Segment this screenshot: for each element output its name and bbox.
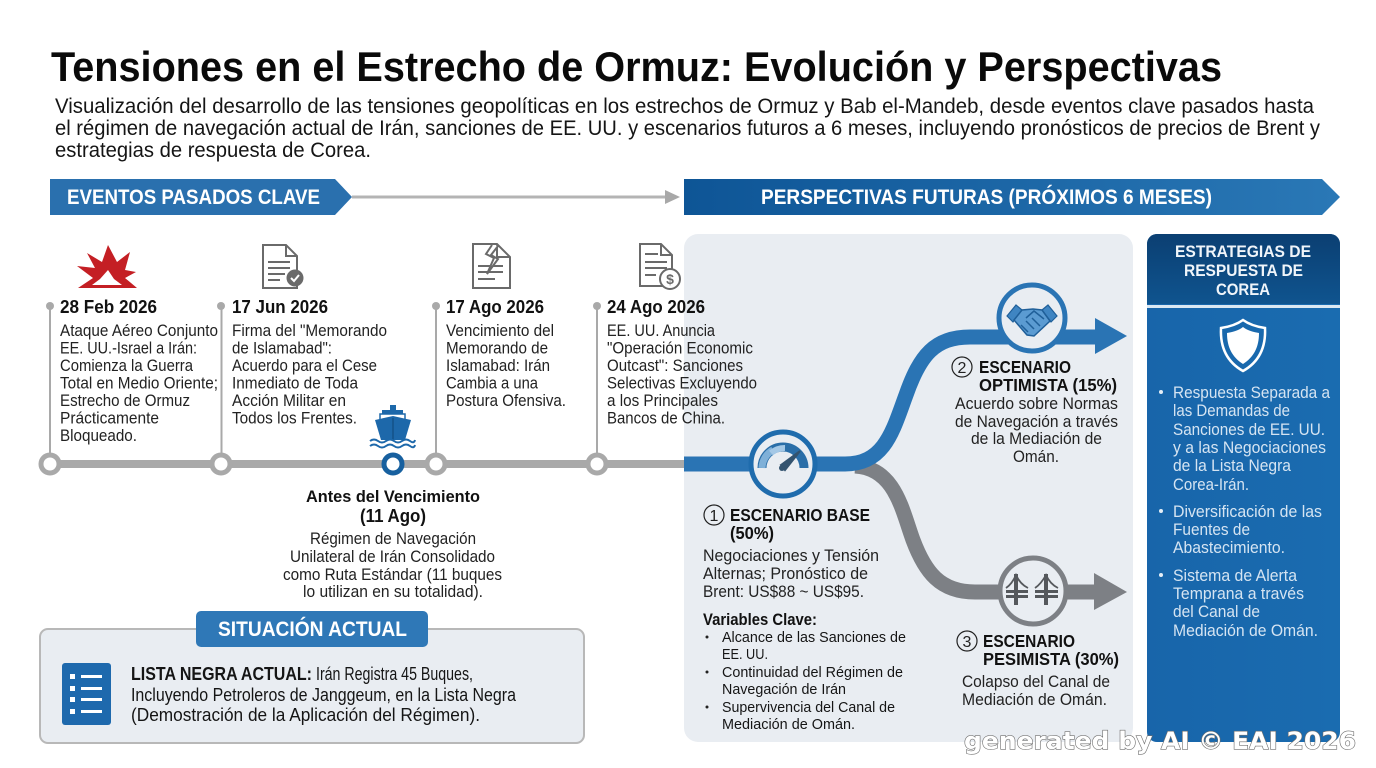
event: 28 Feb 2026: Prácticamente	[60, 408, 159, 428]
scenario: base: 1	[710, 508, 719, 525]
text: strategy list: del Canal de	[1173, 602, 1260, 621]
subtitle text block: Visualización del desarrollo de las tensiones geopolíticas en los estrechos de Ormuz y Bab el-Mandeb, desde eventos clave pasados hasta	[55, 94, 1314, 118]
icon: sanction document: $	[666, 271, 674, 287]
scenario: pesimista: Colapso del Canal de	[962, 672, 1110, 691]
text: lista negra: LISTA NEGRA ACTUAL:	[131, 664, 312, 684]
banner: eventos pasados clave: EVENTOS PASADOS CLAVE	[67, 186, 320, 209]
icon: explosion	[77, 245, 137, 288]
event: 17 Ago 2026: Vencimiento del	[446, 321, 554, 340]
event: 24 Ago 2026: Selectivas Excluyendo	[607, 374, 757, 392]
icon: sanction document	[640, 244, 680, 289]
text: strategy list: Corea-Irán.	[1173, 475, 1249, 494]
text: strategy list: Temprana a través	[1173, 584, 1304, 603]
event: 28 Feb 2026	[60, 297, 218, 445]
panel header: RESPUESTA DE	[1184, 261, 1303, 280]
arrow: optimistic path	[684, 318, 1127, 464]
panel header: ESTRATEGIAS DE	[1175, 242, 1311, 261]
event: antes del vencimiento: Antes del Vencimiento	[306, 487, 480, 506]
panel: situación actual	[40, 611, 584, 743]
event: 17 Ago 2026: Cambia a una	[446, 374, 538, 392]
event: antes del vencimiento: Unilateral de Irán Consolidado	[290, 547, 495, 566]
scenario: pesimista: ESCENARIO	[983, 631, 1075, 651]
scenario: optimista	[952, 357, 1118, 466]
text: variables clave: Mediación de Omán.	[722, 716, 855, 733]
event: 17 Jun 2026	[232, 297, 387, 428]
scenario: pesimista: PESIMISTA (30%)	[983, 649, 1119, 669]
event: 24 Ago 2026: 24 Ago 2026	[607, 297, 705, 317]
event: 28 Feb 2026: Ataque Aéreo Conjunto	[60, 321, 218, 340]
subtitle text block: el régimen de navegación actual de Irán, sanciones de EE. UU. y escenarios futuros a 6 meses, incluyendo pronósticos de precios de Brent y	[55, 116, 1320, 140]
event: 24 Ago 2026: a los Principales	[607, 391, 718, 410]
panel header	[1147, 234, 1340, 308]
text: strategy list: de la Lista Negra	[1173, 456, 1291, 475]
text: strategy list: Respuesta Separada a	[1173, 383, 1330, 402]
event: 17 Ago 2026: Memorando de	[446, 338, 548, 358]
event: 28 Feb 2026: 28 Feb 2026	[60, 297, 157, 317]
text: lista negra: (Demostración de la Aplicación del Régimen).	[131, 705, 480, 725]
scenario: optimista: 2	[958, 360, 967, 377]
text: strategy list: Mediación de Omán.	[1173, 621, 1318, 640]
scenario: base: ESCENARIO BASE	[730, 505, 870, 525]
event: antes del vencimiento: (11 Ago)	[360, 506, 426, 526]
event: 17 Ago 2026: Postura Ofensiva.	[446, 391, 566, 410]
panel header: COREA	[1216, 280, 1270, 299]
panel: scenarios background	[684, 234, 1133, 742]
icon: torn document	[473, 244, 510, 288]
scenario: optimista: ESCENARIO	[979, 357, 1071, 377]
event: 17 Jun 2026: Inmediato de Toda	[232, 374, 358, 392]
event: 24 Ago 2026: Bancos de China.	[607, 408, 725, 428]
event: 28 Feb 2026: EE. UU.-Israel a Irán:	[60, 338, 197, 358]
icon: handshake	[999, 285, 1065, 351]
icon: broken bridge	[1000, 558, 1066, 624]
event: 17 Ago 2026	[446, 297, 566, 410]
scenario: pesimista	[957, 631, 1119, 709]
event: antes del vencimiento: lo utilizan en su totalidad).	[303, 582, 483, 601]
text: variables clave	[703, 610, 906, 733]
text: lista negra: Incluyendo Petroleros de Janggeum, en la Lista Negra	[131, 685, 517, 705]
banner: eventos pasados clave	[50, 179, 352, 215]
event: 28 Feb 2026: Bloqueado.	[60, 426, 137, 445]
text: strategy list: Fuentes de	[1173, 520, 1250, 539]
text: strategy list: Diversificación de las	[1173, 502, 1322, 521]
badge: situación actual: SITUACIÓN ACTUAL	[218, 617, 407, 641]
icon: shield	[1221, 320, 1265, 371]
scenario: base	[703, 505, 906, 733]
scenario: pesimista: 3	[963, 634, 972, 651]
scenario: pesimista: Mediación de Omán.	[962, 690, 1107, 709]
scenario: base: Alternas; Pronóstico de	[703, 564, 868, 583]
event: 28 Feb 2026: Estrecho de Ormuz	[60, 391, 190, 410]
event: antes del vencimiento: como Ruta Estándar (11 buques	[283, 565, 502, 584]
text: variables clave: Supervivencia del Canal de	[722, 699, 895, 716]
title: Tensiones en el Estrecho de Ormuz: Evolución y Perspectivas	[51, 43, 1222, 90]
event: 17 Ago 2026: 17 Ago 2026	[446, 297, 544, 317]
scenario: base: (50%)	[730, 523, 774, 543]
text: variables clave: Navegación de Irán	[722, 681, 846, 698]
subtitle text block: estrategias de respuesta de Corea.	[55, 138, 371, 162]
event: 17 Jun 2026: de Islamabad":	[232, 338, 332, 358]
text: strategy list: Sanciones de EE. UU.	[1173, 420, 1325, 439]
event: 17 Jun 2026: Acuerdo para el Cese	[232, 356, 377, 375]
icon: gauge	[751, 432, 815, 496]
timeline	[41, 302, 686, 473]
event: 17 Jun 2026: Firma del "Memorando	[232, 321, 387, 340]
banner: perspectivas futuras	[684, 179, 1340, 215]
panel: estrategias de respuesta de corea	[1147, 234, 1340, 742]
scenario: optimista: Acuerdo sobre Normas	[955, 394, 1118, 413]
event: 28 Feb 2026: Comienza la Guerra	[60, 356, 193, 375]
text: strategy list: y a las Negociaciones	[1173, 438, 1326, 457]
text: lista negra: Irán Registra 45 Buques,	[316, 664, 473, 684]
event: 24 Ago 2026	[607, 297, 757, 428]
watermark: generated by AI © EAI 2026	[964, 727, 1356, 755]
scenario: base: Brent: US$88 ~ US$95.	[703, 582, 864, 601]
icon: ship	[370, 405, 415, 448]
scenario: optimista: de Navegación a través	[955, 412, 1118, 431]
arrow: pessimistic path	[855, 466, 1127, 610]
event: 17 Jun 2026: Acción Militar en	[232, 391, 346, 410]
scenario: optimista: OPTIMISTA (15%)	[979, 375, 1117, 395]
icon: signed document	[263, 245, 304, 288]
text: strategy list: Abastecimiento.	[1173, 538, 1285, 557]
scenario: base: Negociaciones y Tensión	[703, 546, 879, 565]
text: lista negra	[131, 664, 517, 725]
event: 28 Feb 2026: Total en Medio Oriente;	[60, 374, 218, 392]
icon: list	[62, 663, 111, 725]
event: 24 Ago 2026: EE. UU. Anuncia	[607, 321, 715, 340]
text: strategy list: las Demandas de	[1173, 401, 1290, 420]
event: antes del vencimiento	[283, 487, 502, 601]
subtitle text block	[55, 94, 1320, 162]
text: strategy list	[1159, 383, 1330, 640]
event: 24 Ago 2026: "Operación Economic	[607, 338, 753, 358]
text: variables clave: Alcance de las Sanciones de	[722, 629, 906, 646]
text: variables clave: Variables Clave:	[703, 610, 817, 629]
banner: perspectivas futuras: PERSPECTIVAS FUTURAS (PRÓXIMOS 6 MESES)	[761, 185, 1212, 209]
scenario: optimista: Omán.	[1013, 447, 1059, 466]
arrow: past to future	[352, 190, 680, 204]
event: 17 Ago 2026: Islamabad: Irán	[446, 356, 550, 375]
event: 24 Ago 2026: Outcast": Sanciones	[607, 356, 743, 375]
scenario: optimista: de la Mediación de	[971, 429, 1102, 448]
text: variables clave: Continuidad del Régimen de	[722, 664, 903, 681]
text: variables clave: EE. UU.	[722, 646, 768, 663]
text: strategy list: Sistema de Alerta	[1173, 566, 1297, 585]
event: antes del vencimiento: Régimen de Navegación	[310, 529, 476, 548]
event: 17 Jun 2026: Todos los Frentes.	[232, 408, 357, 428]
badge: situación actual	[196, 611, 428, 647]
event: 17 Jun 2026: 17 Jun 2026	[232, 297, 328, 317]
